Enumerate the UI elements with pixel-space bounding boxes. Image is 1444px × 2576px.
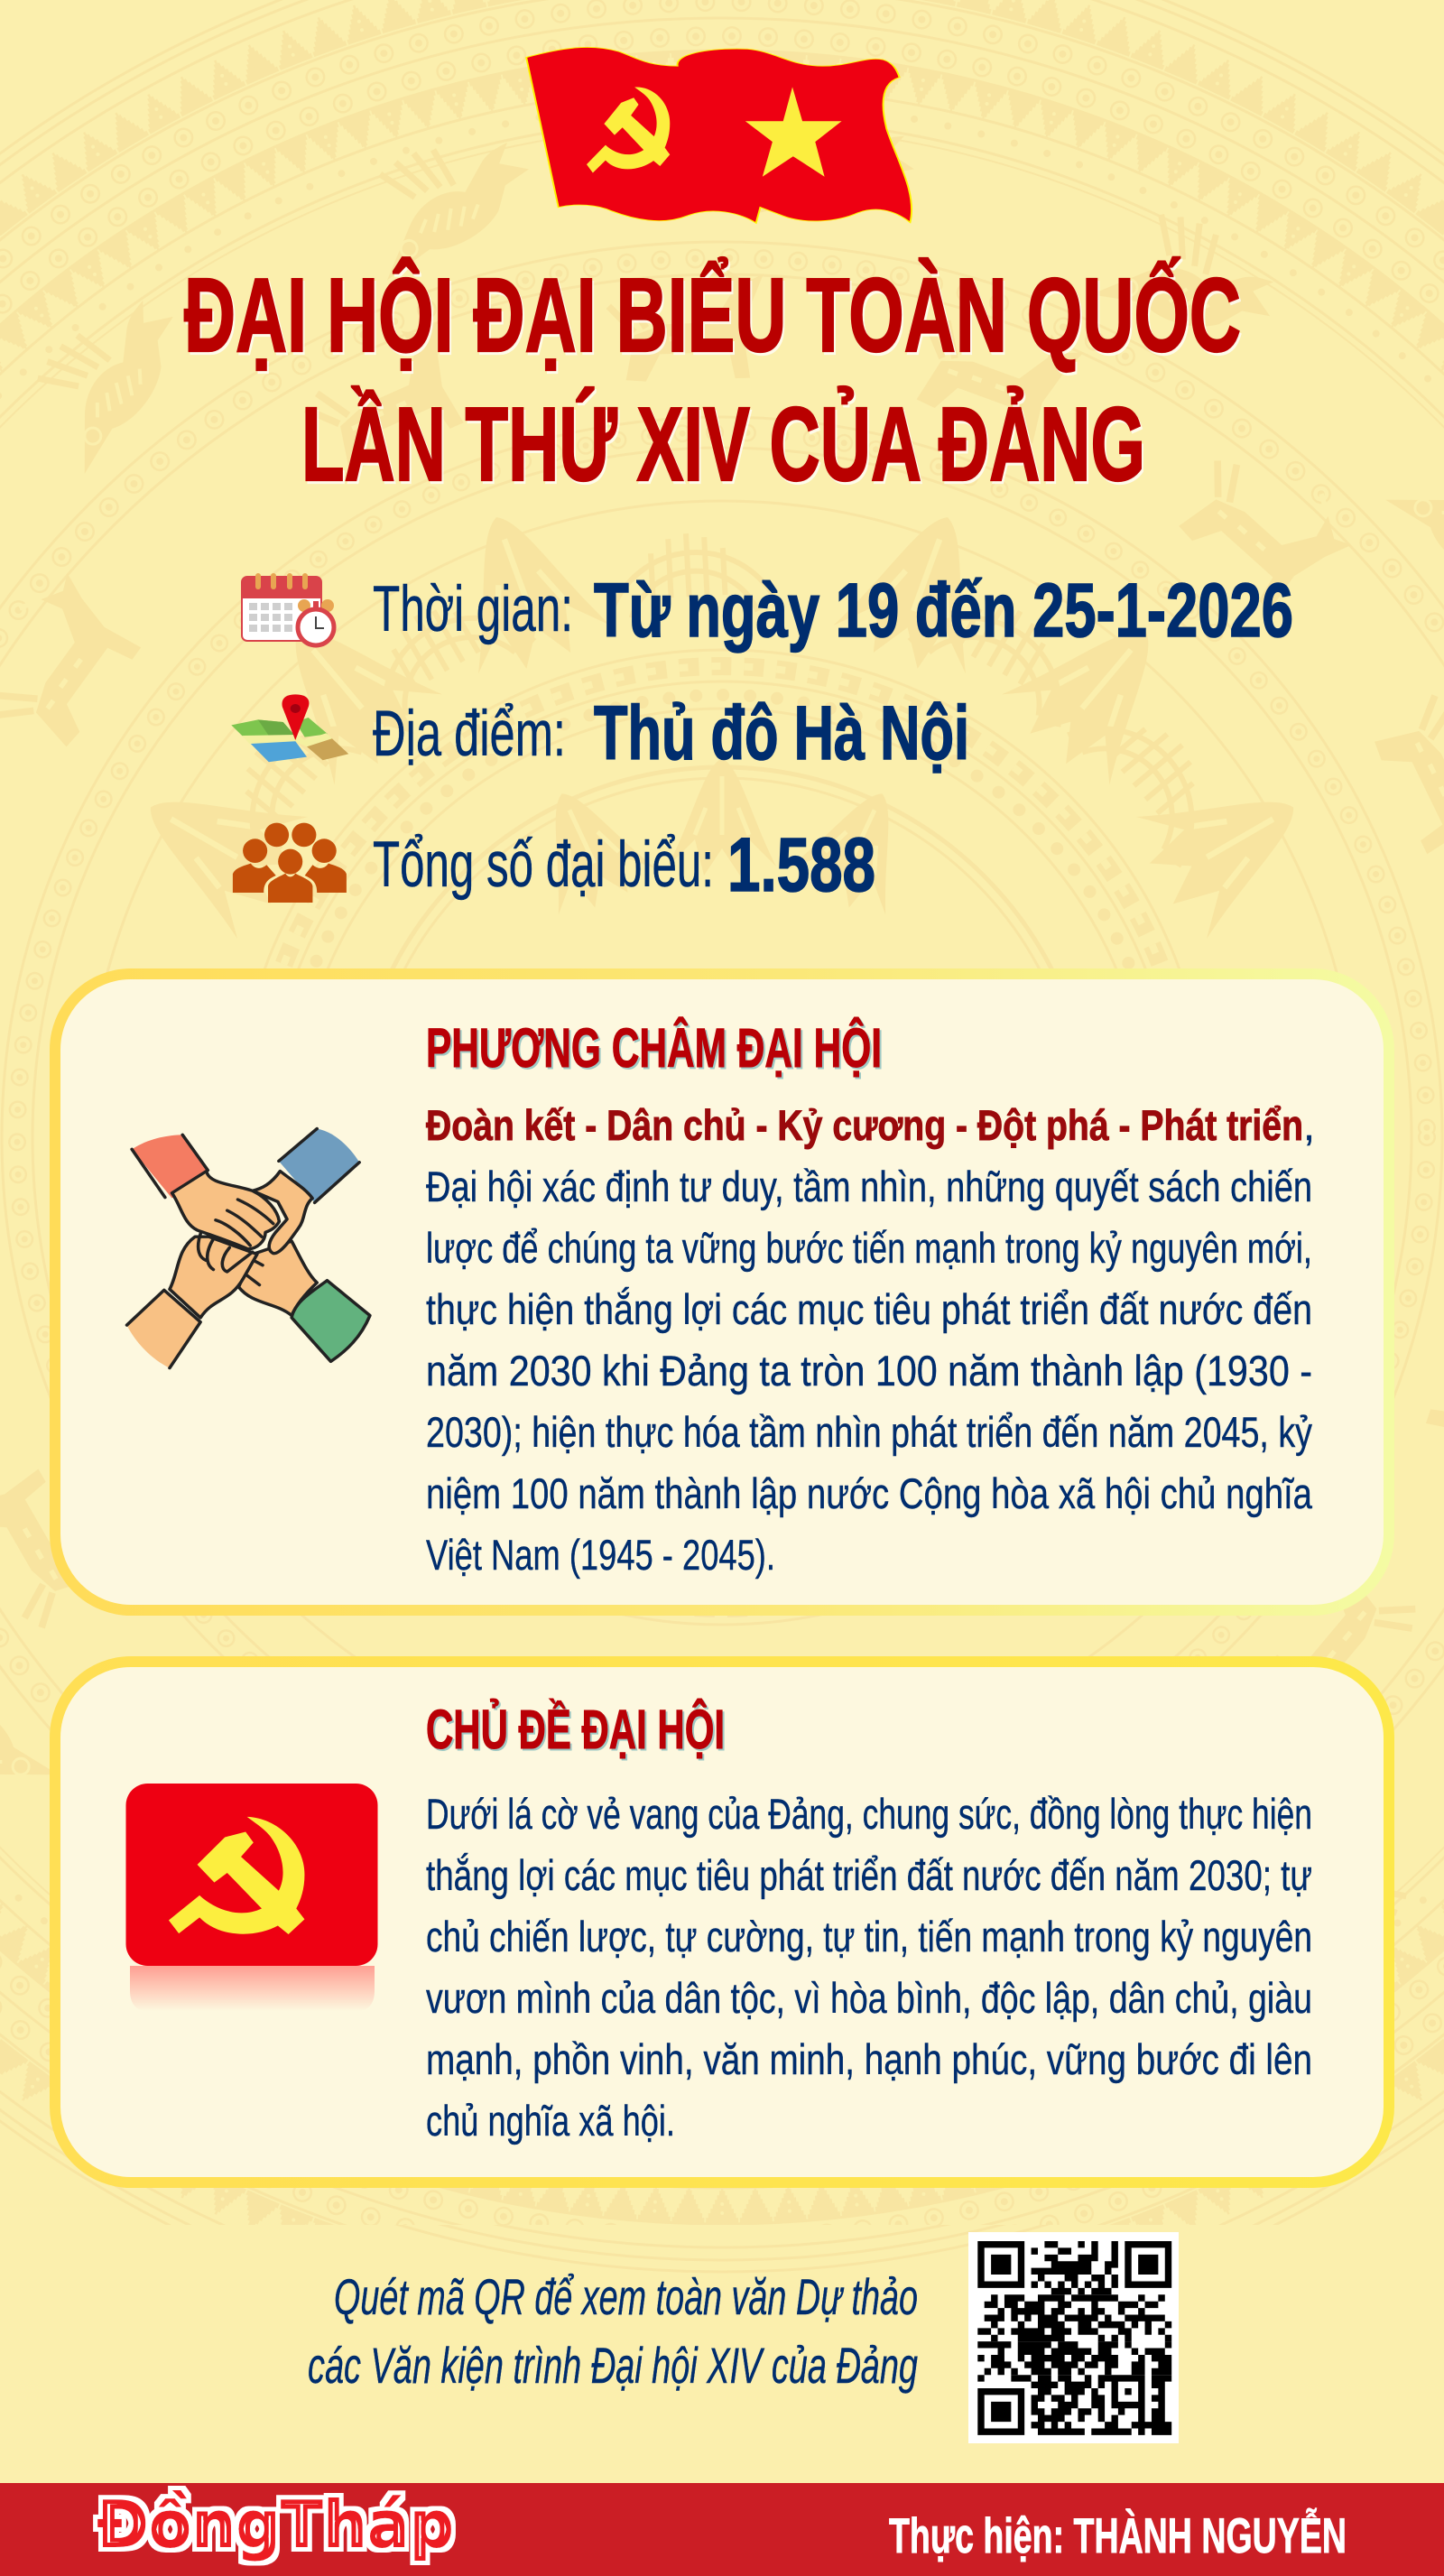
body text: [426, 1790, 1312, 2145]
QR caption: các Văn kiện trình Đại hội XIV của Đảng: [308, 2337, 918, 2394]
flag: party flag with hammer and sickle and star: [526, 47, 912, 223]
value: place: Thủ đô Hà Nội: [594, 690, 969, 775]
QR code: [968, 2232, 1179, 2443]
info row: delegates: [233, 822, 875, 907]
body text: Việt Nam (1945 - 2045).: [426, 1531, 775, 1579]
body text: [426, 1101, 1315, 1579]
info row: place: [231, 690, 969, 775]
icon: red card with hammer and sickle: [126, 1784, 377, 2011]
icon: stacked hands: [127, 1128, 370, 1368]
heading: PHƯƠNG CHÂM ĐẠI HỘI: [426, 1017, 882, 1079]
icon: group of people: [233, 823, 347, 903]
QR caption: Quét mã QR để xem toàn văn Dự thảo: [334, 2268, 918, 2325]
panel: chu de dai hoi: [55, 1662, 1389, 2182]
body text: chủ nghĩa xã hội.: [426, 2097, 675, 2145]
icon: calendar with clock: [242, 573, 334, 645]
panel: phuong cham dai hoi: [55, 974, 1389, 1610]
label: time: Thời gian:: [373, 574, 573, 645]
label: place: Địa điểm:: [373, 699, 566, 770]
info row: time: [242, 568, 1293, 653]
heading: CHỦ ĐỀ ĐẠI HỘI: [426, 1699, 725, 1760]
icon: map with pin: [231, 694, 348, 762]
logo: Dong Thap: ĐồngTháp: [97, 2487, 454, 2562]
title: [184, 256, 1241, 503]
footer band: [0, 2483, 1444, 2576]
label: delegates: Tổng số đại biểu:: [373, 829, 714, 901]
body text: năm 2030 khi Đảng ta tròn 100 năm thành lập (1930 -: [426, 1347, 1312, 1395]
value: delegates: 1.588: [727, 822, 875, 907]
QR caption: [308, 2268, 918, 2394]
body text: ,: [1303, 1101, 1315, 1149]
